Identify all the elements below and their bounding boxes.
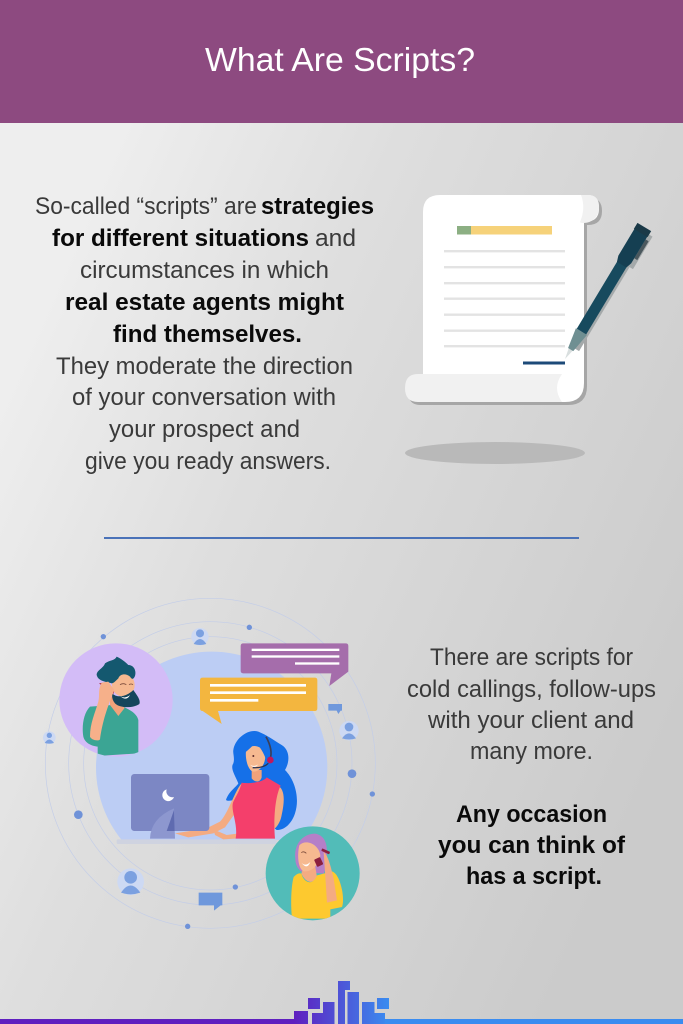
pen [558,223,655,365]
icon: paper scroll and pen [405,195,655,464]
small chat bubbles [199,704,342,911]
text block: kinds of scripts: you can think of [438,832,626,859]
text block: what scripts are: So-called “scripts” are [35,193,257,220]
signature [523,362,565,364]
text block: what scripts are: strategies [261,193,374,220]
footer logo: city skyline bars [294,981,389,1024]
text block: kinds of scripts: cold callings, follow-ups [407,676,656,703]
text block: kinds of scripts [407,644,656,890]
text lines [444,250,565,347]
text block: kinds of scripts: There are scripts for [430,644,633,671]
text block: what scripts are: circumstances in which [80,257,329,284]
heading bar [457,226,552,234]
text block: kinds of scripts: many more. [470,738,593,765]
text block: what scripts are: for different situations [52,225,309,252]
text block: what scripts are: your prospect and [109,416,300,443]
text block: kinds of scripts: Any occasion [456,801,607,828]
text block: what scripts are: give you ready answers. [85,448,331,475]
computer monitor [131,774,209,839]
text block: what scripts are: real estate agents might [65,289,344,316]
header banner [0,0,683,123]
scroll paper [423,195,599,402]
text block: what scripts are: of your conversation with [72,384,336,411]
text block: what scripts are: and [315,225,356,252]
text block: what scripts are [35,193,374,475]
top curl [580,195,599,223]
footer bar [0,1019,683,1024]
orbit rings [45,598,375,928]
caller: woman in teal circle [266,826,360,920]
text block: what scripts are: find themselves. [113,321,302,348]
text block: kinds of scripts: with your client and [427,707,634,734]
divider [104,537,579,539]
floor shadow [405,442,585,464]
scroll shadow [408,198,602,405]
central blue circle [96,652,328,840]
agent woman with headset [175,731,297,839]
text block: what scripts are: They moderate the direction [56,353,353,380]
title: What Are Scripts? [205,41,475,78]
desk [117,839,277,844]
purple speech bubble [241,643,348,686]
caller: bearded man in purple circle [59,643,173,757]
yellow speech bubble [200,678,317,724]
bottom roll [405,374,562,402]
orbit dots [74,625,375,929]
text block: kinds of scripts: has a script. [466,863,602,890]
illustration: call centre agent and callers [43,598,375,929]
orbit user icons [43,628,359,895]
